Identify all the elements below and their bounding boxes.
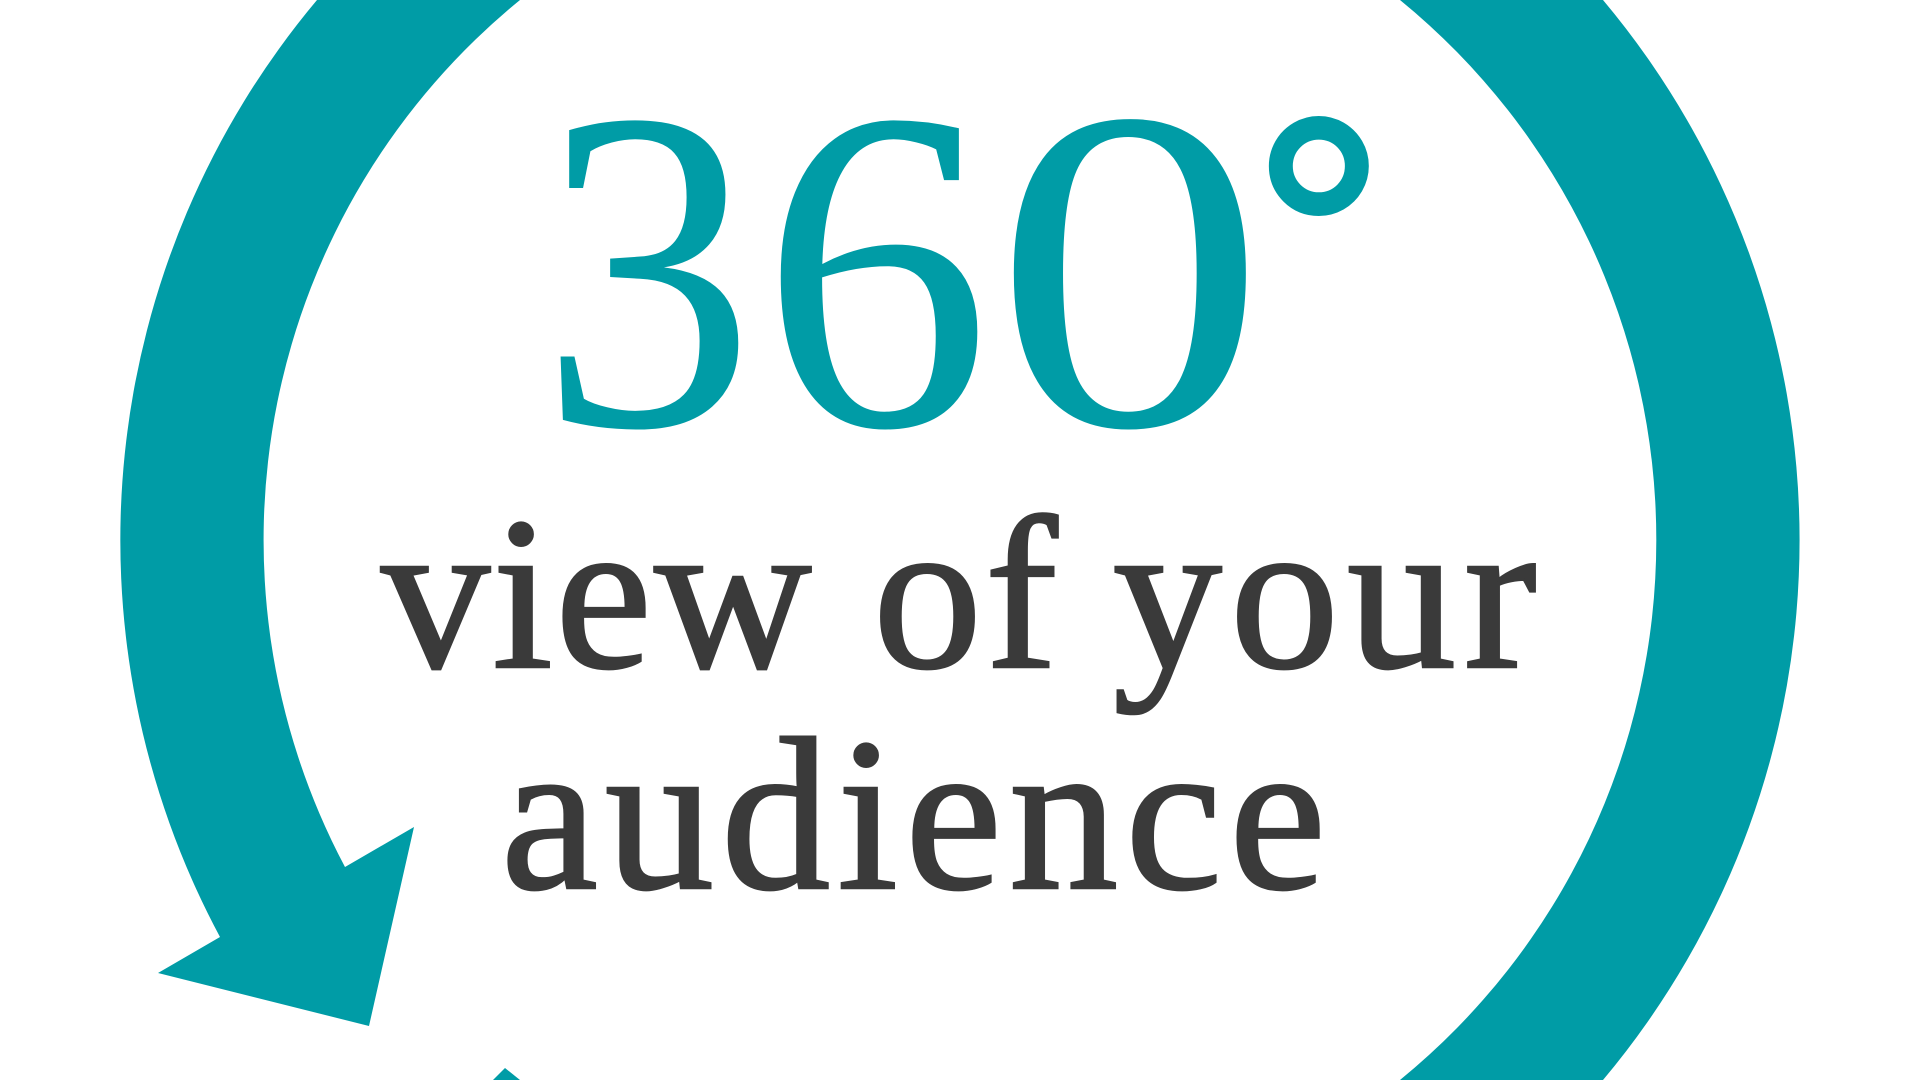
text: view of your: of [873, 474, 1061, 715]
heading: 360 degrees: 3 [540, 16, 755, 525]
text: view of your: view [381, 474, 814, 715]
arc: bottom fragment [493, 1068, 520, 1080]
arrow: circular arc left with arrowhead [120, 0, 520, 1026]
text: view of your: your [1113, 474, 1545, 715]
text: view of your [381, 474, 1545, 715]
heading: 360 degrees: 6 [761, 15, 991, 525]
heading: 360 degrees [540, 15, 1379, 525]
heading: 360 degrees: ° [1259, 53, 1379, 385]
arc: circular ring right [1400, 0, 1800, 1080]
heading: 360 degrees: 0 [993, 16, 1267, 525]
text: audience: audience [501, 695, 1326, 936]
